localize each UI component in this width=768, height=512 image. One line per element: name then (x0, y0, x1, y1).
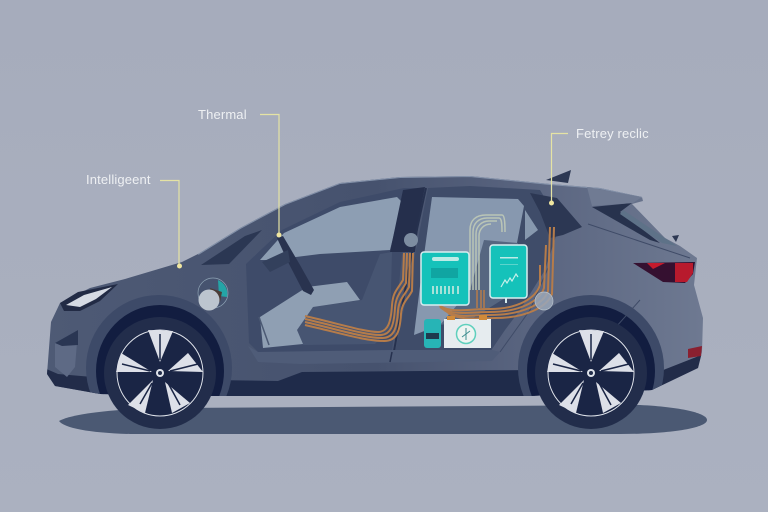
seat light area (260, 282, 360, 348)
front charge port (198, 278, 228, 310)
front wheel arch (86, 295, 232, 396)
tail light (633, 262, 695, 283)
spoiler (587, 187, 642, 206)
callout: Thermal (198, 107, 282, 238)
door bottom frame (248, 346, 500, 364)
body crease (500, 224, 690, 352)
rear arch inner (527, 305, 655, 396)
rear spokes (547, 330, 634, 413)
front spokes (116, 330, 203, 413)
callout: Intelligent: Intelligeent (86, 172, 151, 187)
small teal module (424, 319, 441, 348)
lower front bumper (47, 369, 104, 394)
front wheel (104, 317, 216, 429)
door dark B pillar (390, 187, 425, 252)
ground shadow (59, 405, 707, 434)
battery pack (444, 315, 491, 348)
side windshield triangle (201, 230, 262, 265)
rear quarter window (592, 203, 660, 243)
rear wheel arch (518, 295, 664, 396)
door opening (246, 188, 420, 352)
callout: Intelligent (86, 172, 182, 268)
steering column (262, 250, 290, 272)
rear small glass (525, 210, 538, 240)
roof highlight (198, 176, 642, 254)
rear door opening (395, 186, 556, 352)
car body (47, 176, 703, 396)
pale coolant pipes (470, 215, 505, 290)
front arch inner (96, 305, 224, 396)
rear reflector (688, 346, 702, 358)
rear door glass (414, 197, 524, 335)
callout: Thermal: Thermal (198, 107, 247, 122)
steering wheel (277, 236, 314, 295)
arrow in door (259, 317, 269, 345)
rear wiper (672, 235, 679, 242)
rocker panel (226, 370, 535, 396)
shark fin (546, 170, 571, 183)
front seat (296, 252, 392, 345)
C pillar dark window (530, 193, 582, 238)
rear sensor (535, 292, 553, 310)
wiring harness: rear (438, 227, 554, 319)
rear wheel (535, 317, 647, 429)
left teal control panel (421, 252, 469, 305)
front air intake (55, 330, 78, 377)
car (40, 170, 710, 441)
callout: Fetrey reclic (549, 126, 649, 206)
door sill line (390, 352, 392, 362)
connector pipes (477, 290, 484, 308)
air intake top (55, 330, 78, 346)
wiring harness: front (305, 253, 413, 341)
rear door seat shade (440, 240, 518, 325)
rear window glass (620, 210, 677, 246)
rear bumper (648, 355, 702, 390)
right teal monitor panel (490, 245, 527, 303)
front door glass (260, 197, 402, 260)
callout: Fetrey reclic: Fetrey reclic (576, 126, 649, 141)
pillar sensor (404, 233, 418, 247)
door frame line (392, 188, 426, 362)
headlight (60, 284, 118, 311)
